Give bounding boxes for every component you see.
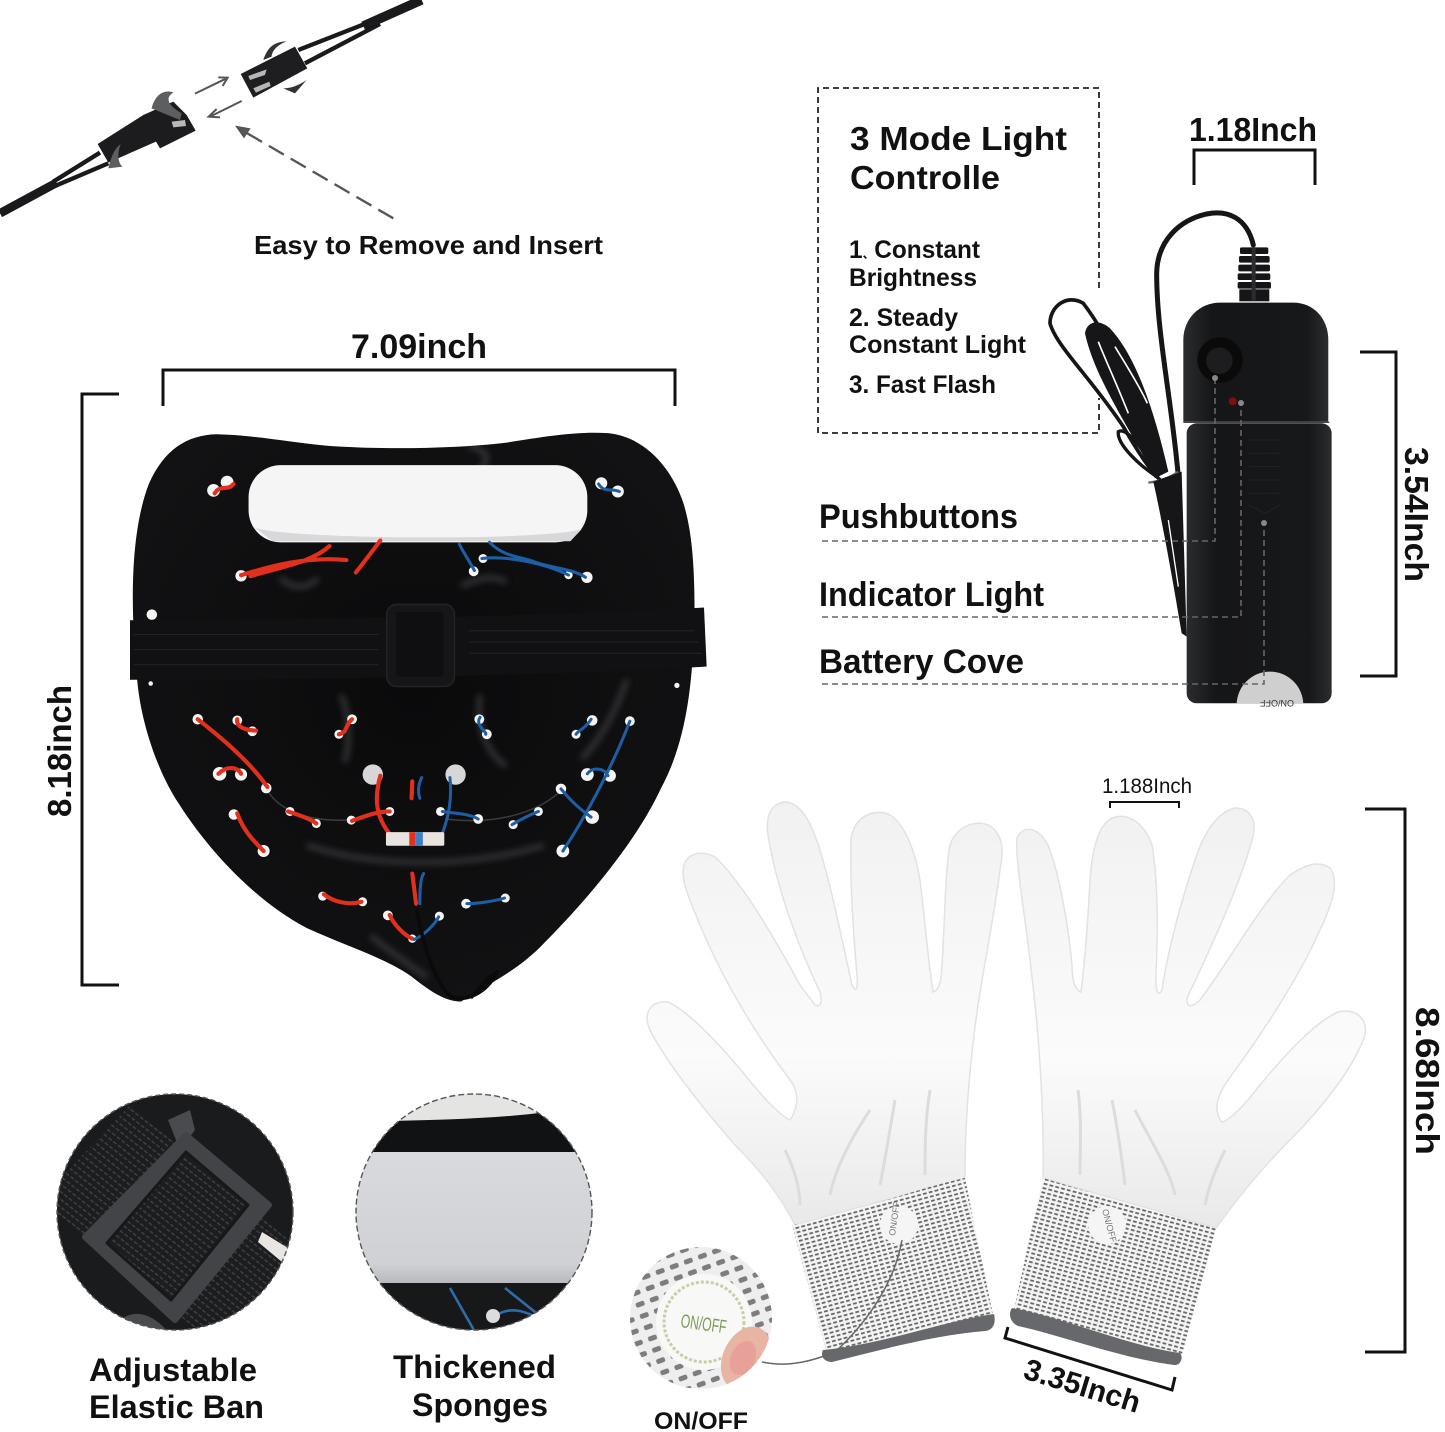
left plug claws — [108, 92, 182, 168]
strap — [57, 1106, 290, 1328]
foam pad — [249, 465, 587, 542]
sticker ring — [664, 1282, 744, 1362]
dimension: glove height: 8.68Inch — [1409, 1007, 1445, 1155]
pushbutton — [1197, 337, 1243, 383]
dimension: controller width — [1189, 111, 1317, 185]
mode 2 line 2: Constant Light — [849, 331, 1027, 359]
mode 2: 2. Steady — [849, 304, 958, 332]
controller top cap — [1183, 303, 1328, 422]
case seam — [1183, 421, 1329, 424]
mode 3: 3. Fast Flash — [849, 371, 996, 399]
sticker text: ON/OFF — [679, 1311, 728, 1338]
switch sticker — [1088, 1206, 1126, 1244]
battery case — [1187, 423, 1332, 703]
photo: connector plugs — [0, 0, 422, 218]
detail: elastic band buckle — [57, 1094, 293, 1330]
dimension: glove height — [1365, 809, 1445, 1352]
pointer head — [235, 126, 251, 138]
finger — [720, 1326, 769, 1384]
photo: controller — [1050, 213, 1332, 738]
hand — [1017, 808, 1365, 1228]
tail cable — [416, 907, 496, 998]
dimension: finger width: 1.188Inch — [1102, 775, 1192, 798]
heading line 2: Controlle — [850, 159, 1000, 196]
left pins — [172, 120, 186, 127]
buckle frame — [85, 1135, 269, 1320]
blue wires — [414, 484, 630, 939]
cuff hem — [1010, 1308, 1182, 1365]
bottom black — [380, 1283, 568, 1330]
leader: battery — [822, 520, 1267, 684]
leader: indicator — [822, 400, 1244, 617]
bundle gaps — [1098, 342, 1147, 413]
wire label — [386, 832, 444, 846]
leader: pushbuttons — [822, 375, 1218, 541]
top light — [400, 1094, 537, 1120]
dimension: mask width: 7.09inch — [351, 328, 487, 366]
right cables — [298, 21, 380, 63]
dimension: controller height — [1360, 352, 1435, 676]
right plug — [241, 47, 307, 98]
caption: sponges — [393, 1349, 556, 1423]
mouth seam — [267, 789, 563, 821]
red wires — [198, 484, 416, 939]
wires — [450, 1288, 545, 1332]
lower bundle gaps — [1168, 520, 1178, 587]
strap ribs — [134, 631, 702, 665]
caption: sponges: Thickened — [393, 1349, 556, 1385]
left plug — [98, 102, 196, 163]
label: pushbuttons: Pushbuttons — [819, 498, 1018, 536]
lower bundle — [1153, 472, 1187, 637]
sticker — [656, 1274, 752, 1370]
strap buckle — [387, 604, 454, 686]
detail outline: band — [57, 1094, 293, 1330]
panel: controller modes — [818, 88, 1099, 433]
mask highlights — [281, 446, 627, 977]
mask body — [133, 433, 695, 1002]
caption: easy to remove: Easy to Remove and Insert — [254, 230, 603, 260]
indicator led — [1229, 397, 1237, 405]
photo: right glove — [1010, 808, 1365, 1365]
sticker text: ON/OFF — [887, 1201, 902, 1236]
strain relief — [1238, 247, 1271, 301]
dimension: cuff width: 3.35Inch — [1020, 1353, 1144, 1420]
left cable strands — [53, 153, 108, 186]
right pins — [248, 69, 271, 93]
sticker text: ON/OFF — [1260, 698, 1294, 708]
photo: mask back — [130, 433, 707, 1002]
caption: elastic band: Adjustable — [89, 1352, 257, 1388]
right cable trunk — [363, 0, 422, 26]
photo: left glove — [647, 802, 1002, 1362]
mode 1: 1、Constant — [849, 236, 981, 264]
buckle slot — [396, 612, 443, 677]
caption: sponges: Sponges — [412, 1387, 548, 1423]
mode 1 line 2: Brightness — [849, 264, 977, 292]
dimension: controller height: 3.54Inch — [1398, 447, 1435, 582]
arrows — [195, 77, 242, 117]
dimension: cuff width — [1005, 1327, 1175, 1420]
label: battery cove: Battery Cove — [819, 643, 1024, 681]
callout wire — [762, 1240, 902, 1364]
fabric folds — [785, 1090, 930, 1205]
black band — [370, 1113, 578, 1155]
detail: thickened sponge — [356, 1094, 592, 1330]
on-off sticker — [1236, 672, 1304, 704]
caption: elastic band — [89, 1352, 264, 1425]
cable bundle — [1085, 322, 1168, 478]
wire holes — [147, 476, 680, 943]
backdrop — [57, 1094, 293, 1330]
detail outline: sponge — [356, 1094, 592, 1330]
foam shade — [254, 527, 582, 541]
hand — [647, 802, 1002, 1225]
dimension: mask height: 8.18inch — [41, 685, 78, 817]
cable tie — [1148, 472, 1178, 483]
cuff — [1012, 1178, 1216, 1362]
heading: 3 Mode Light — [850, 120, 1067, 157]
slide grip — [1248, 440, 1280, 513]
fabric — [630, 1247, 772, 1389]
cuff hem — [822, 1314, 995, 1362]
dimension: finger width — [1102, 775, 1192, 808]
foam — [350, 1152, 600, 1283]
cuff — [792, 1178, 994, 1358]
fabric folds — [1078, 1090, 1225, 1205]
label: indicator light: Indicator Light — [819, 576, 1044, 614]
caption: elastic band: Elastic Ban — [89, 1389, 264, 1425]
dimension: mask height — [41, 394, 119, 985]
elastic strap — [130, 607, 707, 680]
sticker text: ON/OFF — [1100, 1208, 1119, 1244]
dimension: controller width: 1.18Inch — [1189, 111, 1317, 148]
inset: on/off switch — [630, 1247, 772, 1389]
white wedge — [258, 1232, 288, 1262]
hole — [486, 1309, 500, 1323]
coiled cable — [1050, 213, 1253, 480]
dimension: mask width — [163, 328, 675, 406]
switch sticker — [880, 1206, 918, 1244]
buckle opening — [107, 1152, 248, 1300]
plastic sheen — [123, 1110, 195, 1330]
right plug claws — [263, 41, 307, 93]
left cable — [0, 183, 57, 213]
dashed pointer — [243, 131, 393, 218]
